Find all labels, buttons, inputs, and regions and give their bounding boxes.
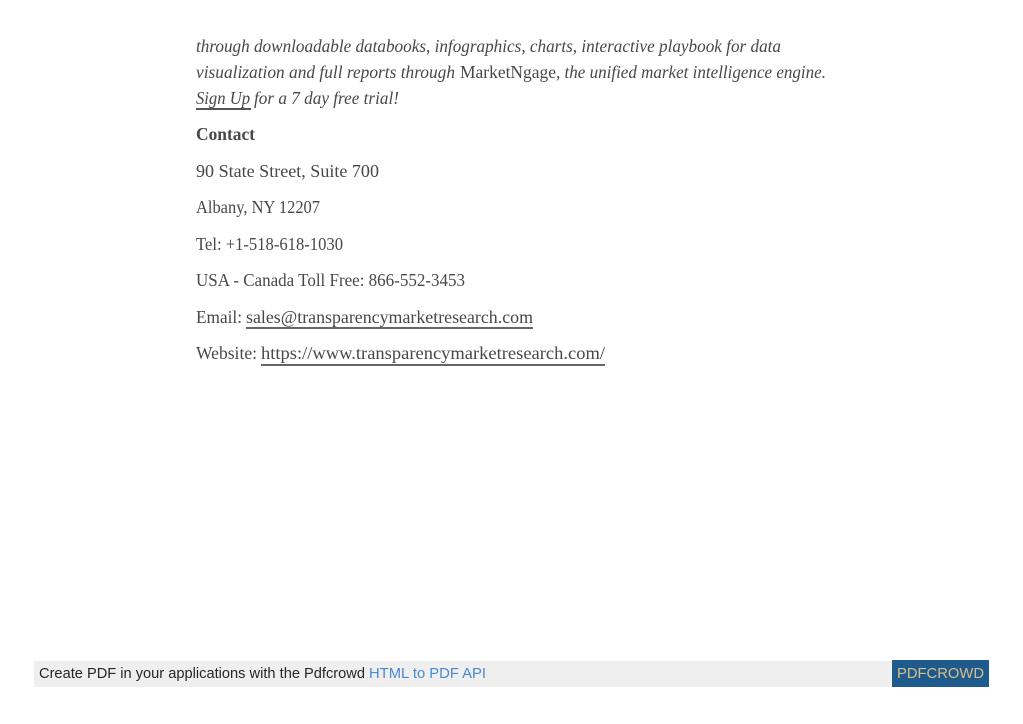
text: email link: Email: — [196, 307, 242, 327]
text: telephone: Tel: +1-518-618-1030 — [196, 234, 343, 254]
text: email link: sales@transparencymarketresearch.com — [246, 307, 533, 327]
footer banner: pdfcrowd — [34, 660, 989, 687]
text block: intro paragraph: for a 7 day free trial! — [254, 88, 399, 108]
text: city and state: Albany, NY 12207 — [196, 197, 320, 217]
text block: intro paragraph: Sign Up — [196, 88, 250, 108]
heading: contact: Contact — [196, 124, 255, 144]
text block: intro paragraph: visualization and full reports through — [196, 62, 455, 82]
text: toll free number: USA - Canada Toll Free: 866-552-3453 — [196, 270, 465, 290]
text block: intro paragraph — [196, 36, 826, 110]
button: PDFCROWD — [892, 660, 989, 687]
text: website link — [196, 343, 605, 366]
text: street address: 90 State Street, Suite 700 — [196, 161, 379, 181]
text block: intro paragraph: MarketNgage — [460, 62, 556, 82]
text block: intro paragraph: , the unified market intelligence engine. — [556, 62, 826, 82]
text: website link: https://www.transparencymarketresearch.com/ — [261, 343, 605, 363]
footer text: HTML to PDF API — [369, 666, 486, 682]
footer text: Create PDF in your applications with the Pdfcrowd — [39, 666, 365, 682]
button: PDFCROWD: PDFCROWD — [897, 666, 984, 682]
text block: intro paragraph: through downloadable databooks, infographics, charts, interactive playbook for data — [196, 36, 781, 56]
text: website link: Website: — [196, 343, 257, 363]
